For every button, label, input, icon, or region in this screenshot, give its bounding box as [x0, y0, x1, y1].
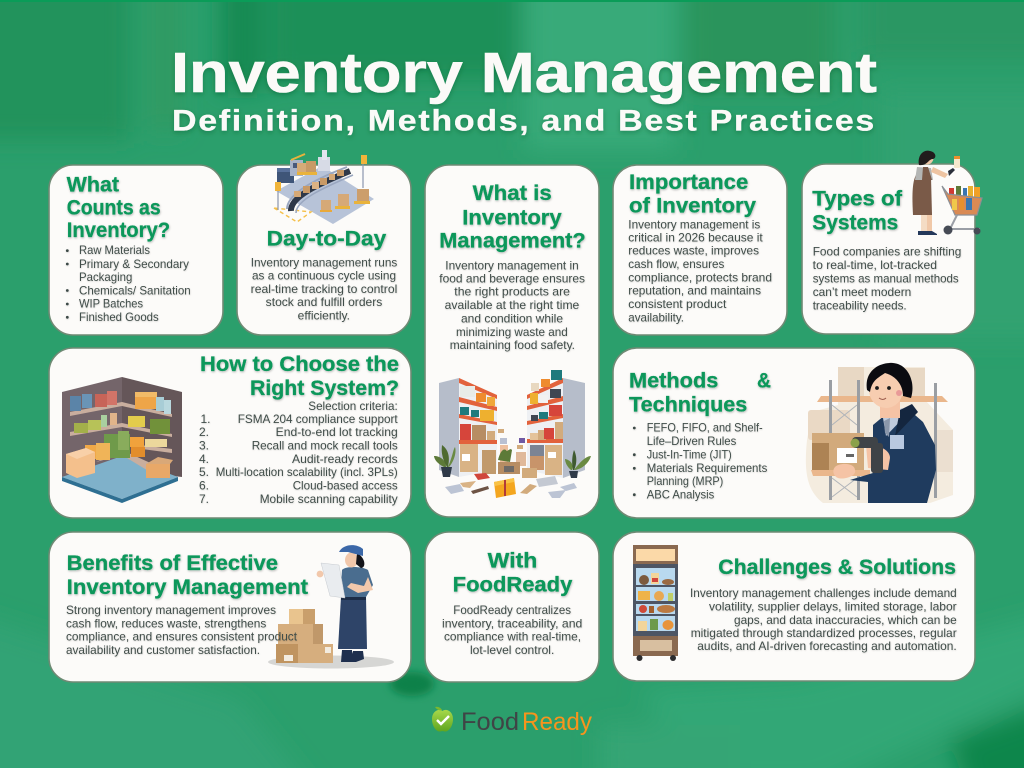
heading: with foodready	[453, 550, 573, 597]
text block: foodready: lot-level control.	[470, 643, 554, 657]
heading: types of systems: Systems	[812, 211, 898, 234]
text block: types: systems as manual methods	[813, 271, 959, 285]
logo: FoodReady: Food	[461, 708, 519, 736]
bullet list: inventory kinds: WIP Batches	[79, 297, 143, 311]
text block: day-to-day: as a continuous cycle using	[252, 269, 396, 283]
panel: challenges and solutions	[613, 532, 975, 681]
text block: foodready	[442, 603, 582, 657]
text block: day-to-day	[251, 255, 397, 322]
text block: definition: Inventory management in	[445, 258, 579, 272]
text block: definition	[439, 258, 585, 352]
heading: types of systems	[812, 188, 903, 234]
heading: what is inventory management	[439, 182, 586, 253]
panel: day-to-day	[237, 150, 411, 335]
numbered list: selection criteria: Cloud-based access	[293, 479, 398, 493]
bullet list: inventory kinds: Primary & Secondary	[79, 257, 189, 271]
text block: challenges: mitigated through standardized processes, regular	[691, 626, 957, 640]
text block: challenges: volatility, supplier delays, limited storage, labor	[709, 599, 957, 613]
bullet list: methods	[633, 421, 767, 501]
numbered list: selection criteria: Recall and mock recall tools	[252, 439, 398, 453]
text block: day-to-day: real-time tracking to control	[251, 282, 397, 296]
heading: importance of inventory: Importance	[629, 171, 748, 194]
numbered list: selection criteria	[199, 399, 398, 506]
title: Definition, Methods, and Best Practices	[172, 104, 876, 138]
text block: importance: cash flow, ensures	[628, 257, 724, 271]
heading: what is inventory management: Inventory	[462, 206, 562, 230]
text block: challenges: gaps, and data inaccuracies, which can be	[734, 613, 957, 627]
text block: types: can’t meet modern	[813, 285, 911, 299]
bullet list: methods: Just-In-Time (JIT)	[647, 447, 732, 461]
text block: foodready: inventory, traceability, and	[442, 616, 582, 630]
text block: importance: consistent product	[628, 297, 727, 311]
title: Inventory Management	[171, 41, 877, 105]
bullet list: inventory kinds: Raw Materials	[79, 243, 150, 257]
heading: what counts as inventory	[67, 174, 170, 242]
heading: methods and techniques: Methods	[629, 370, 718, 393]
text block: day-to-day: efficiently.	[298, 308, 350, 322]
heading: importance of inventory: of Inventory	[629, 195, 756, 218]
icon: messy warehouse shelves	[434, 370, 591, 498]
heading: what is inventory management: Management?	[439, 230, 586, 253]
logo: FoodReady	[432, 707, 592, 736]
icon: storage room	[62, 377, 182, 503]
numbered list: selection criteria: 6.	[199, 479, 209, 493]
heading: types of systems: Types of	[812, 188, 903, 211]
panel: types of systems	[802, 151, 982, 334]
icon: shopper with cart	[912, 151, 982, 235]
text block: types: traceability needs.	[813, 298, 907, 312]
numbered list: selection criteria: Multi-location scalability (incl. 3PLs)	[216, 465, 398, 479]
numbered list: selection criteria: 2.	[199, 425, 209, 439]
text block: definition: available at the right time	[445, 298, 580, 312]
heading: challenges and solutions: Challenges & Solutions	[718, 556, 956, 579]
panel: what counts as inventory	[49, 165, 223, 335]
heading: importance of inventory	[629, 171, 756, 218]
logo: FoodReady: Ready	[522, 708, 592, 736]
numbered list: selection criteria: 4.	[199, 452, 209, 466]
heading: how to choose: How to Choose the	[200, 353, 399, 376]
bullet list: inventory kinds: Packaging	[79, 270, 132, 284]
text block: importance: compliance, protects brand	[628, 270, 772, 284]
text block: importance	[628, 217, 772, 324]
text block: challenges: audits, and AI-driven forecasting and automation.	[697, 639, 957, 653]
text block: challenges	[690, 586, 957, 653]
icon: worker with checklist and boxes	[268, 545, 394, 668]
text block: benefits: Strong inventory management improves	[66, 603, 276, 617]
heading: benefits: Inventory Management	[67, 576, 308, 599]
text block: foodready: compliance with real-time,	[444, 630, 581, 644]
text block: definition: food and beverage ensures	[439, 271, 585, 285]
bullet list: inventory kinds: Finished Goods	[79, 310, 159, 324]
heading: benefits: Benefits of Effective	[67, 552, 278, 575]
text block: day-to-day: Inventory management runs	[251, 255, 397, 269]
heading: methods and techniques: Techniques	[629, 394, 747, 417]
bullet list: methods: ABC Analysis	[647, 487, 714, 501]
text block: definition: minimizing waste and	[456, 325, 568, 339]
text block: benefits: availability and customer satisfaction.	[66, 643, 260, 657]
heading: what counts as inventory: Counts as	[67, 196, 161, 220]
text block: benefits: cash flow, reduces waste, strengthens	[66, 616, 266, 630]
heading: benefits	[67, 552, 308, 599]
text block: benefits: compliance, and ensures consistent product	[66, 630, 298, 644]
numbered list: selection criteria: 1.	[200, 412, 211, 426]
heading: with foodready: With	[488, 550, 537, 573]
text block: types: Food companies are shifting	[813, 245, 961, 259]
text block: day-to-day: stock and fulfill orders	[266, 295, 382, 309]
numbered list: selection criteria: Mobile scanning capability	[260, 492, 398, 506]
numbered list: selection criteria: FSMA 204 compliance support	[238, 412, 398, 426]
heading: with foodready: FoodReady	[453, 574, 573, 597]
heading: what counts as inventory: What	[67, 174, 119, 197]
bullet list: inventory kinds	[66, 243, 191, 324]
panel: with foodready	[425, 532, 599, 682]
text block: definition: maintaining food safety.	[450, 338, 575, 352]
text block: foodready: FoodReady centralizes	[453, 603, 571, 617]
bullet list: methods: Materials Requirements	[647, 461, 767, 475]
heading: what counts as inventory: Inventory?	[67, 219, 170, 242]
numbered list: selection criteria: 7.	[199, 492, 209, 506]
icon: conveyor line	[274, 150, 374, 224]
heading: what is inventory management: What is	[473, 182, 552, 205]
text block: importance: Inventory management is	[628, 217, 760, 231]
numbered list: selection criteria: End-to-end lot tracking	[276, 425, 398, 439]
numbered list: selection criteria: Selection criteria:	[308, 399, 398, 413]
text block: importance: reduces waste, improves	[628, 243, 759, 257]
bullet list: methods: Life–Driven Rules	[647, 434, 736, 448]
heading: methods and techniques	[629, 370, 771, 417]
text block: types	[813, 245, 961, 312]
icon: food display fridge	[633, 545, 678, 661]
icon: apple with check	[432, 707, 453, 732]
heading: methods and techniques: &	[757, 370, 771, 393]
icon: warehouse worker with scanner	[806, 363, 953, 503]
text block: importance: reputation, and maintains	[628, 283, 761, 297]
text block: types: to real-time, lot-tracked	[813, 258, 937, 272]
panel: benefits of effective inventory management	[49, 532, 411, 682]
text block: importance: availability.	[628, 310, 684, 324]
numbered list: selection criteria: 5.	[199, 465, 209, 479]
text block: definition: and condition while	[461, 311, 563, 325]
panel: what is inventory management	[425, 165, 599, 517]
heading: day-to-day: Day-to-Day	[267, 228, 387, 251]
numbered list: selection criteria: Audit-ready records	[292, 452, 398, 466]
text block: benefits	[66, 603, 298, 657]
title	[171, 41, 877, 138]
panel: methods and techniques	[613, 348, 975, 518]
bullet list: inventory kinds: Chemicals/ Sanitation	[79, 283, 191, 297]
panel: how to choose the right system	[49, 348, 411, 518]
bullet list: methods: FEFO, FIFO, and Shelf-	[647, 421, 763, 435]
heading: how to choose	[200, 353, 399, 400]
text block: challenges: Inventory management challenges include demand	[690, 586, 957, 600]
panel: importance of inventory	[613, 165, 787, 335]
text block: definition: the right products are	[454, 285, 570, 299]
heading: how to choose: Right System?	[250, 377, 399, 400]
numbered list: selection criteria: 3.	[199, 439, 209, 453]
text block: importance: critical in 2026 because it	[628, 230, 763, 244]
bullet list: methods: Planning (MRP)	[647, 474, 723, 488]
